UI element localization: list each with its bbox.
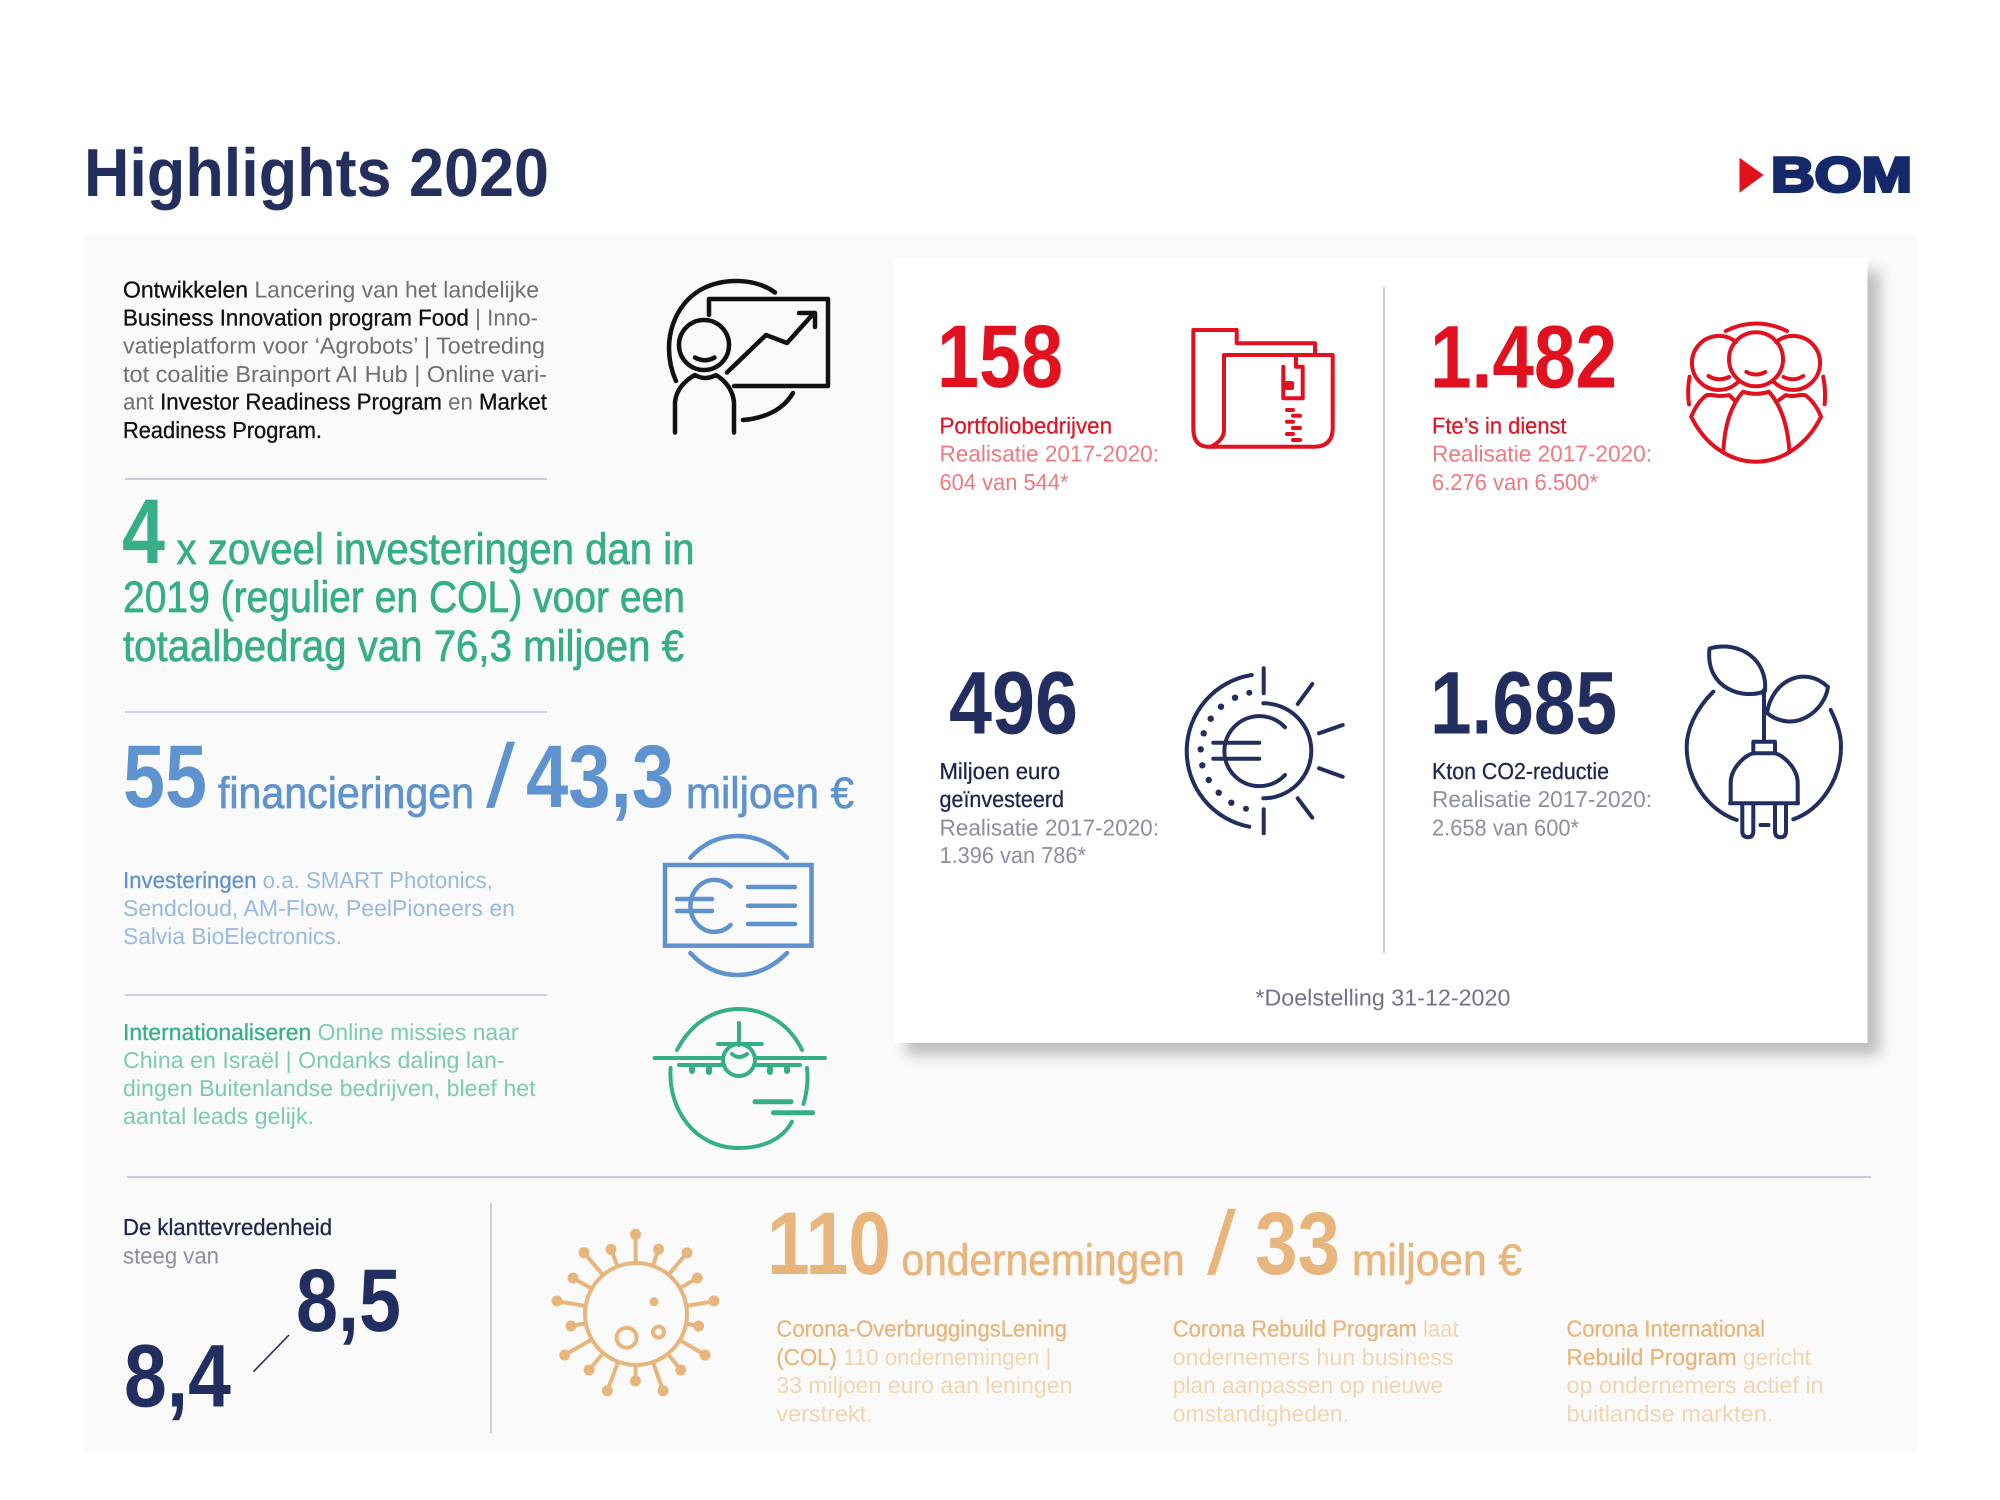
logo: BOM: BOM xyxy=(1771,148,1912,202)
text block: corona international rebuild program: buitlandse markten. xyxy=(1566,1401,1774,1427)
callout: 110 ondernemingen / 33 miljoen: 33 xyxy=(1255,1193,1340,1293)
chart: score 8,4 to 8,5 xyxy=(124,1250,401,1426)
text block: klanttevredenheid xyxy=(123,1214,332,1268)
stat: 158 portfoliobedrijven: Realisatie 2017-2020: xyxy=(940,441,1159,467)
icon: euro banknote xyxy=(665,836,812,975)
icon: group of people xyxy=(1688,324,1825,462)
panel: key figures card xyxy=(894,258,1880,1055)
text block: internationaliseren: aantal leads gelijk. xyxy=(123,1103,314,1129)
text block: corona-overbruggingslening xyxy=(776,1316,1072,1427)
text block: ontwikkelen: vatieplatform voor ‘Agrobots’ | Toetreding xyxy=(123,333,545,359)
logo: BOM xyxy=(1740,148,1912,202)
stat: 496 miljoen euro: geïnvesteerd xyxy=(940,786,1064,812)
panel: background xyxy=(83,235,1918,1452)
callout: 55 financieringen / 43,3 miljoen: 43,3 xyxy=(526,726,674,826)
text block: internationaliseren: China en Israël | Ondanks daling lan- xyxy=(123,1047,505,1073)
text block: corona rebuild program: plan aanpassen op nieuwe xyxy=(1173,1372,1443,1398)
callout: 55 financieringen / 43,3 miljoen: financieringen xyxy=(218,769,474,818)
text block: corona rebuild program: Corona Rebuild Program laat xyxy=(1173,1316,1459,1342)
callout: 4x zoveel investeringen: 4 xyxy=(122,481,165,583)
stat: 158 portfoliobedrijven xyxy=(937,306,1159,495)
icon: airplane xyxy=(654,1009,825,1148)
stat: 1.482 fte's: 1.482 xyxy=(1430,306,1617,406)
text block: ontwikkelen: Readiness Program. xyxy=(123,417,322,443)
callout: 110 ondernemingen / 33 miljoen: miljoen € xyxy=(1352,1236,1522,1285)
icon: presenter with chart xyxy=(669,281,828,432)
callout: 110 ondernemingen / 33 miljoen: ondernemingen xyxy=(902,1236,1184,1285)
text block: ontwikkelen: Ontwikkelen Lancering van het landelijke xyxy=(123,276,539,302)
icon: plant plug xyxy=(1687,647,1841,837)
icon: euro coin with rays xyxy=(1187,668,1343,833)
stat: 1.685 kton CO2-reductie: 2.658 van 600* xyxy=(1432,815,1579,841)
stat: 1.685 kton CO2-reductie: Kton CO2-reductie xyxy=(1432,758,1609,784)
text block: corona-overbruggingslening: 33 miljoen euro aan leningen xyxy=(776,1372,1072,1398)
callout: 4x zoveel investeringen xyxy=(122,481,694,671)
stat: 1.482 fte's xyxy=(1430,306,1652,495)
text block: internationaliseren: dingen Buitenlandse bedrijven, bleef het xyxy=(123,1075,536,1101)
footnote: *Doelstelling 31-12-2020 xyxy=(1255,985,1510,1011)
text block: corona international rebuild program xyxy=(1566,1316,1824,1427)
text block: corona international rebuild program: Rebuild Program gericht xyxy=(1566,1344,1812,1370)
callout: 4x zoveel investeringen: totaalbedrag van 76,3 miljoen € xyxy=(123,622,684,671)
stat: 1.685 kton CO2-reductie xyxy=(1430,652,1652,841)
text block: corona international rebuild program: op ondernemers actief in xyxy=(1566,1372,1824,1398)
icon: folder with zipper xyxy=(1193,330,1333,447)
stat: 1.685 kton CO2-reductie: Realisatie 2017-2020: xyxy=(1432,786,1652,812)
text block: investeringen: Sendcloud, AM-Flow, PeelPioneers en xyxy=(123,895,515,921)
callout: 4x zoveel investeringen: x zoveel investeringen dan in xyxy=(176,525,694,574)
text block: corona rebuild program: ondernemers hun business xyxy=(1173,1344,1454,1370)
text block: investeringen xyxy=(123,867,515,949)
text block: corona international rebuild program: Corona International xyxy=(1566,1316,1765,1342)
chart: score 8,4 to 8,5: 8,4 xyxy=(124,1326,231,1426)
callout: 110 ondernemingen / 33 miljoen xyxy=(767,1193,1522,1294)
stat: 496 miljoen euro: 496 xyxy=(949,652,1078,752)
text block: klanttevredenheid: steeg van xyxy=(123,1242,219,1268)
callout: 55 financieringen / 43,3 miljoen: 55 xyxy=(123,726,207,826)
stat: 496 miljoen euro: Miljoen euro xyxy=(940,758,1060,784)
text block: klanttevredenheid: De klanttevredenheid xyxy=(123,1214,332,1240)
callout: 55 financieringen / 43,3 miljoen: miljoen € xyxy=(686,769,854,818)
stat: 1.482 fte's: Realisatie 2017-2020: xyxy=(1432,441,1652,467)
text block: ontwikkelen xyxy=(123,276,548,443)
callout: 55 financieringen / 43,3 miljoen xyxy=(123,726,854,827)
stat: 158 portfoliobedrijven: 604 van 544* xyxy=(940,469,1069,495)
callout: 110 ondernemingen / 33 miljoen: / xyxy=(1207,1194,1236,1294)
text block: investeringen: Investeringen o.a. SMART Photonics, xyxy=(123,867,493,893)
stat: 158 portfoliobedrijven: 158 xyxy=(937,306,1063,406)
stat: 1.482 fte's: Fte’s in dienst xyxy=(1432,412,1567,438)
callout: 4x zoveel investeringen: 2019 (regulier en COL) voor een xyxy=(123,573,685,622)
stat: 496 miljoen euro: Realisatie 2017-2020: xyxy=(940,815,1159,841)
text block: ontwikkelen: tot coalitie Brainport AI Hub | Online vari- xyxy=(123,361,547,387)
text block: corona-overbruggingslening: (COL) 110 ondernemingen | xyxy=(776,1344,1051,1370)
stat: 1.685 kton CO2-reductie: 1.685 xyxy=(1430,652,1617,752)
text block: investeringen: Salvia BioElectronics. xyxy=(123,923,342,949)
stat: 496 miljoen euro: 1.396 van 786* xyxy=(940,842,1086,868)
text block: corona rebuild program: omstandigheden. xyxy=(1173,1401,1349,1427)
text block: corona-overbruggingslening: verstrekt. xyxy=(776,1401,873,1427)
stat: 158 portfoliobedrijven: Portfoliobedrijven xyxy=(940,412,1112,438)
chart: score 8,4 to 8,5: 8,5 xyxy=(296,1250,401,1350)
text block: internationaliseren xyxy=(123,1019,536,1129)
title: Highlights 2020 xyxy=(84,135,549,211)
text block: internationaliseren: Internationaliseren Online missies naar xyxy=(123,1019,519,1045)
text block: corona-overbruggingslening: Corona-OverbruggingsLening xyxy=(776,1316,1067,1342)
callout: 110 ondernemingen / 33 miljoen: 110 xyxy=(767,1193,891,1293)
icon: corona virus xyxy=(552,1229,720,1396)
stat: 496 miljoen euro xyxy=(940,652,1159,868)
callout: 55 financieringen / 43,3 miljoen: / xyxy=(486,727,515,827)
text block: corona rebuild program xyxy=(1173,1316,1459,1427)
text block: ontwikkelen: Business Innovation program Food | Inno- xyxy=(123,304,538,330)
text block: ontwikkelen: ant Investor Readiness Program en Market xyxy=(123,389,548,415)
stat: 1.482 fte's: 6.276 van 6.500* xyxy=(1432,469,1598,495)
